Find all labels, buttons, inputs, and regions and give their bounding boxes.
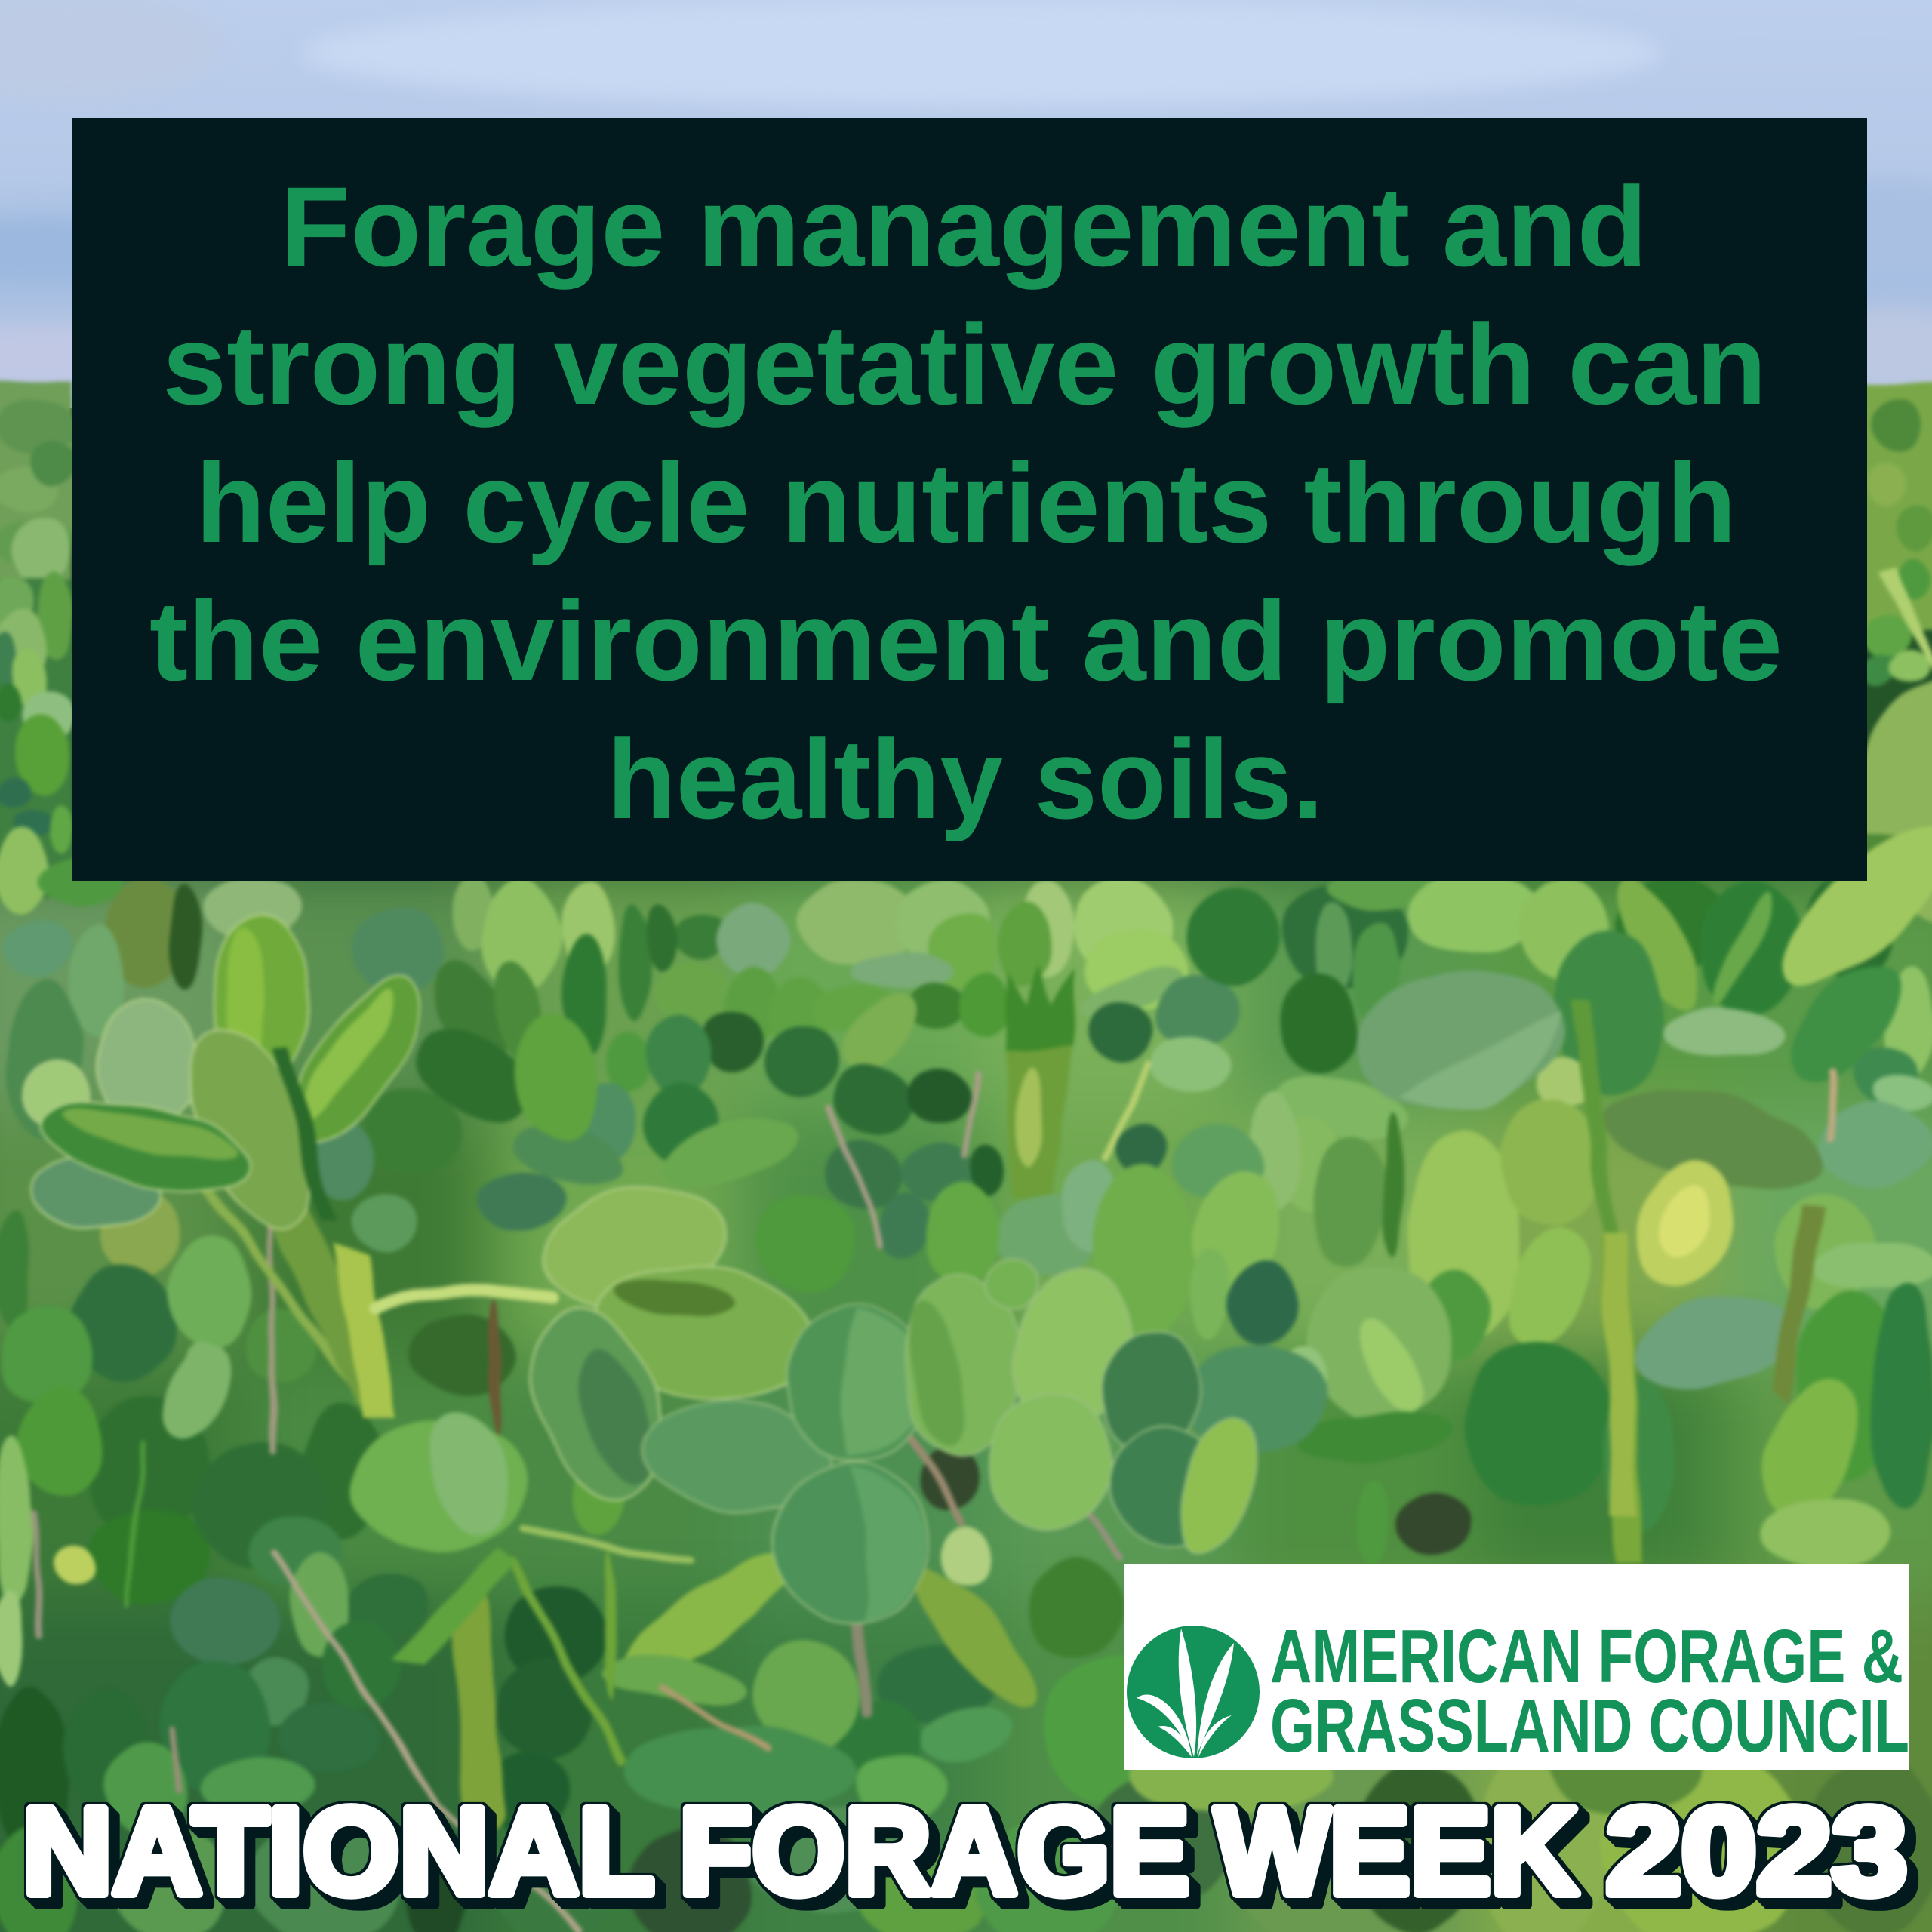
panel: dark headline box bbox=[72, 118, 1867, 881]
twigs and stems bbox=[35, 1072, 1829, 1932]
title: National Forage Week 2023: WEEK bbox=[1215, 1782, 1578, 1920]
far field left strip bbox=[0, 380, 122, 914]
title: National Forage Week 2023: FORAGE bbox=[679, 1782, 1189, 1920]
right top bbox=[1279, 884, 1407, 988]
near left cluster bbox=[26, 914, 551, 1417]
heading: forage management statement: help cycle nutrients through bbox=[195, 439, 1737, 566]
central clover bbox=[637, 1258, 1272, 1623]
title: National Forage Week 2023: NATIONAL bbox=[23, 1782, 654, 1920]
heading: forage management statement bbox=[149, 163, 1783, 842]
far field right strip bbox=[1858, 382, 1932, 929]
icon: grass emblem bbox=[1127, 1626, 1260, 1758]
logo: American Forage and Grassland Council bbox=[1124, 1564, 1909, 1770]
title: National Forage Week 2023: 2023 bbox=[1606, 1782, 1907, 1920]
background photo: sky bbox=[0, 0, 1932, 408]
near blurred right leaves bbox=[1346, 958, 1833, 1515]
heading: forage management statement: healthy soils. bbox=[607, 715, 1324, 842]
distant canopy tops bbox=[0, 802, 1932, 1437]
lower layer bbox=[0, 1390, 1188, 1858]
heading: forage management statement: strong vegetative growth can bbox=[162, 301, 1767, 428]
mid foreground leaves bbox=[755, 1130, 1932, 1571]
near lower-left leaf and stems bbox=[149, 1335, 526, 1663]
logo wordmark bbox=[1270, 1614, 1909, 1768]
bottom band bbox=[0, 1710, 1932, 1932]
heading: forage management statement: Forage management and bbox=[280, 163, 1647, 290]
heading: forage management statement: the environment and promote bbox=[149, 577, 1783, 704]
background photo: regional colour wash under foliage bbox=[0, 863, 1932, 1932]
center top bbox=[796, 880, 924, 964]
title: National Forage Week 2023 bbox=[23, 1782, 1907, 1920]
near trefoil E F G bbox=[509, 1171, 828, 1517]
